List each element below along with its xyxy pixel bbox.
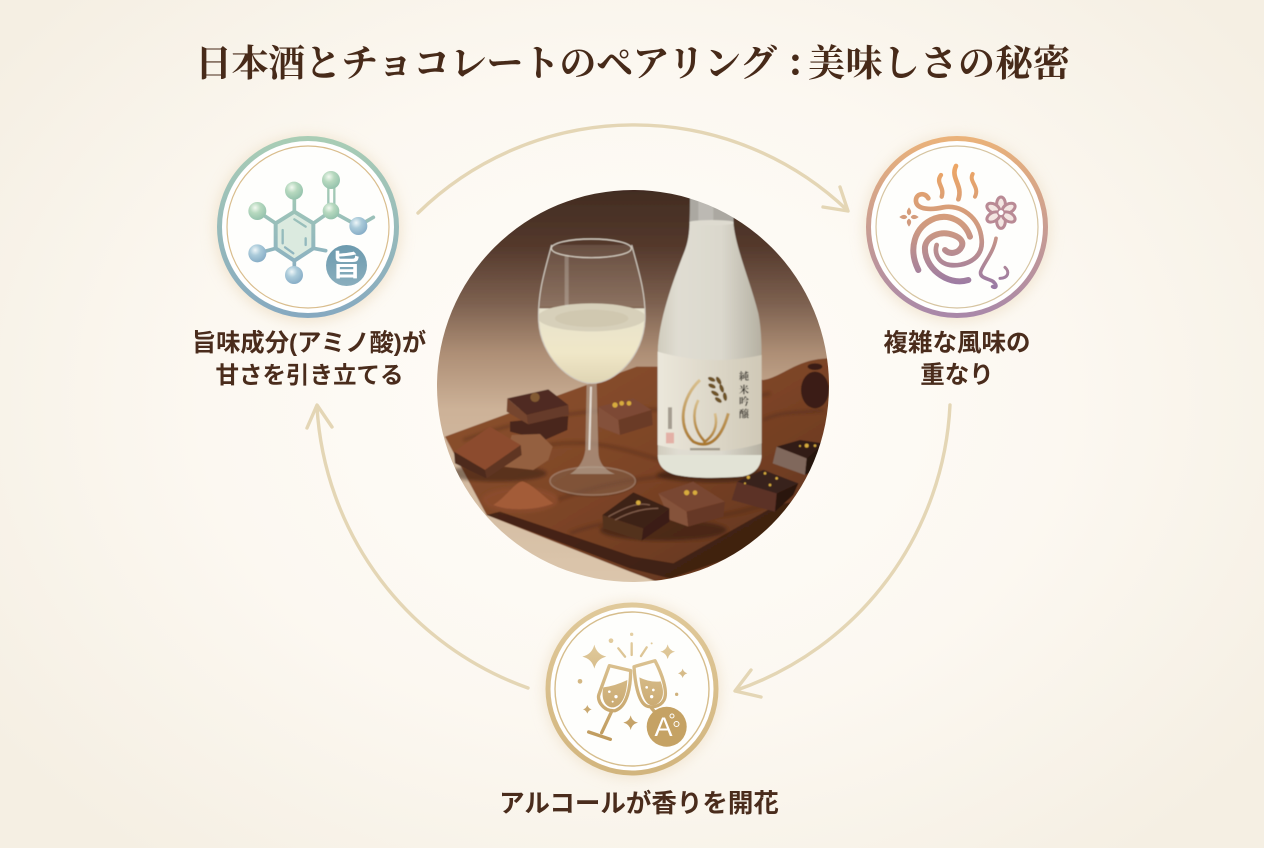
icon: toasting glasses	[578, 633, 687, 739]
panel: umami amino acids badge	[215, 136, 401, 322]
title: 日本酒とチョコレートのペアリング	[195, 43, 777, 85]
bottle label: 米	[739, 383, 749, 396]
bottle label	[658, 352, 762, 451]
icon: aroma A badge	[647, 707, 687, 747]
bottle label: 吟	[739, 395, 749, 408]
label: umami: 旨味成分(アミノ酸)が	[192, 329, 426, 357]
label: umami: 甘さを引き立てる	[216, 362, 404, 388]
panel: complex flavour badge	[864, 136, 1050, 322]
chocolates left stack	[447, 389, 569, 482]
sake bottle	[656, 198, 762, 484]
icon: aroma A badge: A	[654, 712, 673, 742]
label: alcohol aroma: アルコールが香りを開花	[499, 789, 779, 818]
cocoa powder	[482, 482, 558, 513]
title: ：	[786, 44, 822, 85]
chocolates foreground	[600, 440, 830, 541]
wooden board	[445, 358, 830, 587]
icon: aroma swirl, flower and nose	[899, 166, 1017, 287]
chocolate with gold behind glass	[598, 398, 653, 435]
wine glass	[530, 237, 653, 497]
icon: umami character badge	[326, 245, 367, 286]
icon: molecule	[248, 171, 373, 284]
label: umami	[192, 329, 426, 388]
label: complex flavour: 複雑な風味の	[884, 329, 1030, 357]
arrow: left, aroma to umami	[307, 405, 528, 688]
panel: alcohol aroma badge	[544, 602, 720, 778]
label: complex flavour	[884, 329, 1030, 389]
bottle label: 純	[739, 370, 749, 383]
title	[195, 43, 1072, 85]
title: 美味しさの秘密	[808, 43, 1072, 85]
arrow: right, flavour to aroma	[735, 405, 950, 697]
arrow: top, umami to flavour	[418, 125, 848, 213]
bottle label: 醸	[739, 407, 749, 420]
central photo: sake and chocolate	[430, 180, 840, 590]
icon: umami character badge: 旨	[332, 250, 361, 282]
label: complex flavour: 重なり	[920, 361, 994, 389]
